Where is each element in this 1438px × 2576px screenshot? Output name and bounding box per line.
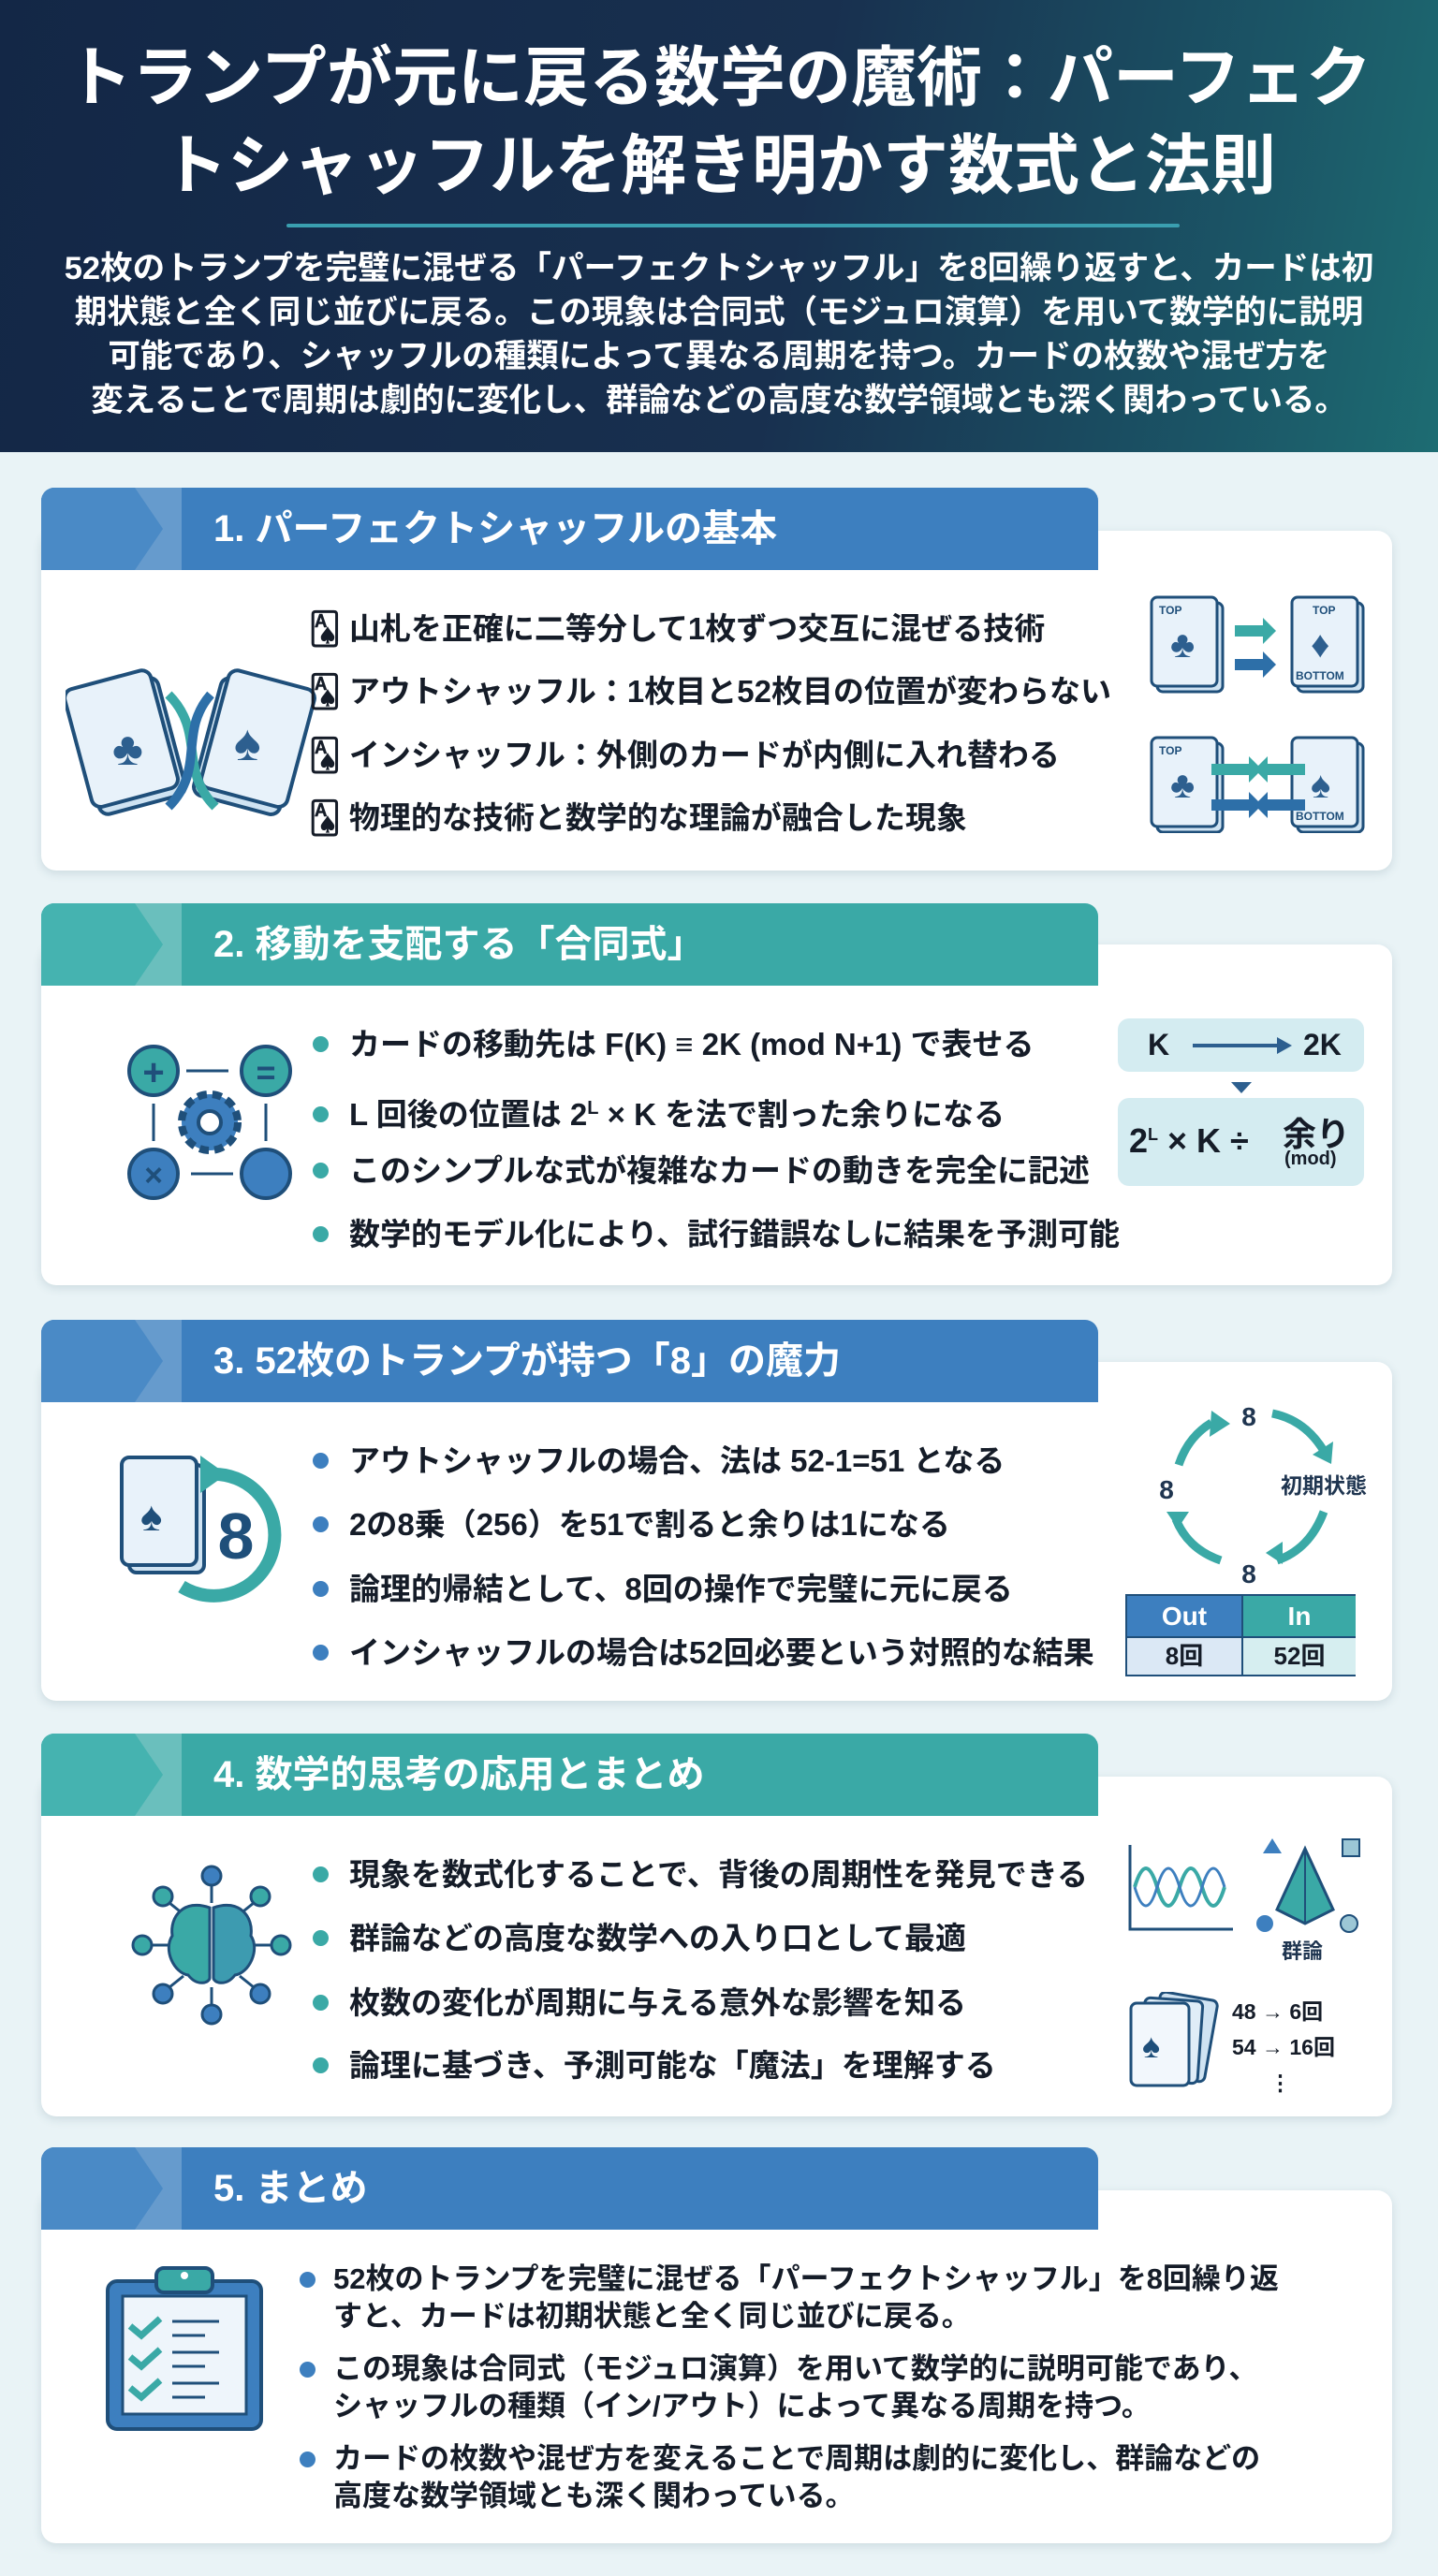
bullet list: 2の8乗（256）を51で割ると余りは1になる [349,1507,950,1542]
bullet list: 論理に基づき、予測可能な「魔法」を理解する [349,2048,996,2083]
bullet list: 🂡 山札を正確に二等分して1枚ずつ交互に混ぜる技術 [309,611,1045,646]
bullet list: 🂡 物理的な技術と数学的な理論が融合した現象 [309,800,967,835]
heading: section 4: 4. 数学的思考の応用とまとめ [213,1754,704,1795]
bullet list: 現象を数式化することで、背後の周期性を発見できる [349,1857,1088,1892]
summary bullets: 高度な数学領域とも深く関わっている。 [333,2480,854,2512]
icon: out/in shuffle diagrams: ♣ [1170,765,1195,806]
icon: group theory: 群論 [1282,1939,1323,1963]
heading: section 3: 3. 52枚のトランプが持つ「8」の魔力 [213,1340,841,1382]
icon: card stack with counts: ⋮ [1269,2071,1291,2095]
panel: section 1 card [41,531,1392,871]
bullet list [313,1857,1088,2083]
bullet list: 枚数の変化が周期に与える意外な影響を知る [349,1985,966,2020]
icon: shuffling cards: ♣ [112,723,143,775]
panel: section 5 card [41,2190,1392,2543]
panel: section 4 card [41,1777,1392,2116]
bullet list: このシンプルな式が複雑なカードの動きを完全に記述 [349,1153,1090,1188]
icon: shuffling cards: ♠ [234,715,261,771]
heading: section 5 [41,2147,1098,2230]
icon: operations gear [127,1045,292,1200]
icon: card with cycle 8: 8 [218,1500,254,1573]
heading: section 3 [41,1320,1098,1402]
table: out vs in: In [1288,1602,1311,1631]
bullet list: カードの移動先は F(K) ≡ 2K (mod N+1) で表せる [349,1027,1034,1061]
heading: section 1 [41,488,1098,570]
bullet list: アウトシャッフルの場合、法は 52-1=51 となる [349,1443,1005,1478]
formula diagram [1118,1018,1364,1186]
icon: out/in shuffle diagrams: TOP [1159,604,1181,617]
cycle diagram [1159,1402,1367,1587]
icon: group theory [1256,1838,1360,1963]
bullet list [313,1443,1094,1670]
icon: card stack with counts: 54 → 16回 [1232,2035,1335,2059]
icon: shuffling cards [66,668,316,816]
summary bullets: シャッフルの種類（イン/アウト）によって異なる周期を持つ。 [333,2390,1151,2422]
panel: section 2 card [41,944,1392,1285]
icon: card with cycle 8 [120,1456,281,1603]
table: out vs in: 8回 [1166,1642,1203,1670]
summary bullets: すと、カードは初期状態と全く同じ並びに戻る。 [333,2300,971,2333]
bullet list: 群論などの高度な数学への入り口として最適 [349,1921,966,1955]
bullet list [309,610,1111,837]
icon: wave chart [1129,1845,1233,1930]
bullet list: 論理的帰結として、8回の操作で完璧に元に戻る [349,1572,1013,1606]
cycle diagram: 8 [1159,1475,1174,1504]
icon: out/in shuffle diagrams: ♠ [1311,765,1330,806]
icon: out/in shuffle diagrams [1150,595,1365,833]
icon: card stack with counts: ♠ [1142,2027,1160,2065]
summary bullets: 52枚のトランプを完璧に混ぜる「パーフェクトシャッフル」を8回繰り返 [333,2262,1279,2295]
bullet list: インシャッフルの場合は52回必要という対照的な結果 [349,1635,1094,1670]
formula diagram: 2L × K ÷ [1129,1121,1249,1160]
bullet list [313,1027,1120,1251]
formula diagram: 余り [1283,1115,1350,1153]
lead paragraph: 可能であり、シャッフルの種類によって異なる周期を持つ。カードの枚数や混ぜ方を [108,339,1330,374]
heading: section 1: 1. パーフェクトシャッフルの基本 [213,508,777,549]
icon: card with cycle 8: ♠ [140,1494,162,1540]
heading: section 5: 5. まとめ [213,2168,367,2209]
title [66,41,1372,202]
header banner [0,0,1438,452]
cycle diagram: 初期状態 [1281,1473,1367,1498]
icon: out/in shuffle diagrams: TOP [1313,604,1335,617]
icon: clipboard checklist [106,2266,263,2431]
bullet list: L 回後の位置は 2L × K を法で割った余りになる [349,1097,1005,1132]
summary bullets [300,2262,1279,2512]
lead paragraph: 52枚のトランプを完璧に混ぜる「パーフェクトシャッフル」を8回繰り返すと、カードは初 [65,251,1373,286]
summary bullets: カードの枚数や混ぜ方を変えることで周期は劇的に変化し、群論などの [333,2442,1260,2475]
icon: out/in shuffle diagrams: BOTTOM [1296,669,1344,682]
bullet list: 🂡 アウトシャッフル：1枚目と52枚目の位置が変わらない [309,674,1111,709]
icon: out/in shuffle diagrams: TOP [1159,744,1181,757]
formula diagram: (mod) [1284,1149,1337,1169]
table: out vs in: Out [1162,1602,1207,1631]
title: トランプが元に戻る数学の魔術：パーフェク [66,41,1372,114]
heading: section 2 [41,903,1098,986]
lead paragraph [65,251,1373,418]
heading: section 2: 2. 移動を支配する「合同式」 [213,924,704,965]
formula diagram: K [1148,1028,1169,1061]
formula diagram: 2K [1303,1028,1342,1061]
icon: card stack with counts [1129,1992,1335,2095]
lead paragraph: 期状態と全く同じ並びに戻る。この現象は合同式（モジュロ演算）を用いて数学的に説明 [75,295,1363,330]
icon: operations gear: + [142,1052,165,1093]
bullet list: 数学的モデル化により、試行錯誤なしに結果を予測可能 [349,1217,1120,1251]
icon: operations gear: × [144,1158,163,1193]
summary bullets: この現象は合同式（モジュロ演算）を用いて数学的に説明可能であり、 [333,2352,1257,2385]
icon: operations gear: = [256,1053,276,1091]
icon: out/in shuffle diagrams: ♦ [1311,624,1329,666]
icon: out/in shuffle diagrams: ♣ [1170,624,1195,666]
icon: card stack with counts: 48 → 6回 [1232,1999,1323,2024]
icon: out/in shuffle diagrams: BOTTOM [1296,810,1344,823]
bullet list: 🂡 インシャッフル：外側のカードが内側に入れ替わる [309,738,1060,772]
table: out vs in [1125,1594,1356,1676]
cycle diagram: 8 [1241,1402,1256,1431]
title: トシャッフルを解き明かす数式と法則 [162,129,1276,202]
heading: section 4 [41,1734,1098,1816]
panel: section 3 card [41,1362,1392,1701]
icon: brain network [131,1865,292,2026]
lead paragraph: 変えることで周期は劇的に変化し、群論などの高度な数学領域とも深く関わっている。 [91,383,1347,418]
table: out vs in: 52回 [1274,1642,1325,1670]
